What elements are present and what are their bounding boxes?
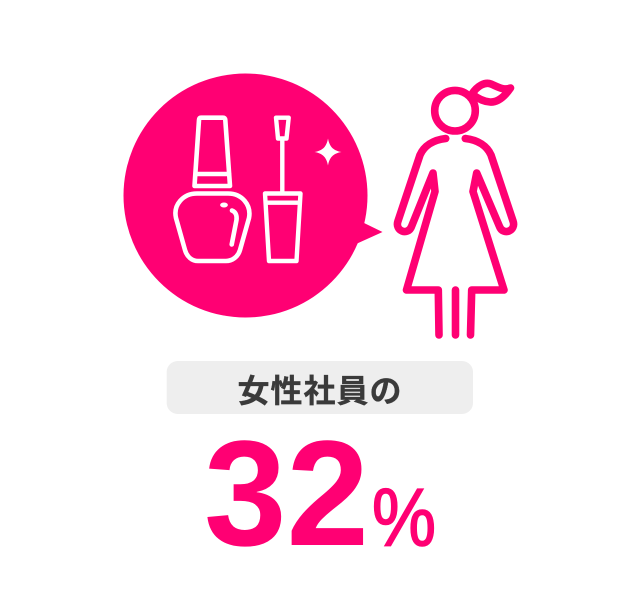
- label text: 女性社員の: [237, 373, 403, 409]
- percent sign: %: [372, 472, 436, 564]
- icon: nail polish bottle: [175, 118, 249, 261]
- right arm and body: [465, 138, 514, 335]
- icon: sparkle: [314, 138, 342, 166]
- number 32: 32: [204, 409, 369, 577]
- center leg line: [452, 290, 459, 335]
- speech bubble with nail polish: [124, 74, 382, 318]
- ponytail: [472, 83, 510, 102]
- left arm and body: [397, 138, 446, 335]
- icon: woman: [397, 83, 514, 335]
- bubble background: [124, 74, 382, 318]
- label pill: [167, 361, 473, 414]
- percentage value: [204, 409, 436, 577]
- icon: nail polish brush: [265, 118, 300, 261]
- head: [435, 90, 475, 131]
